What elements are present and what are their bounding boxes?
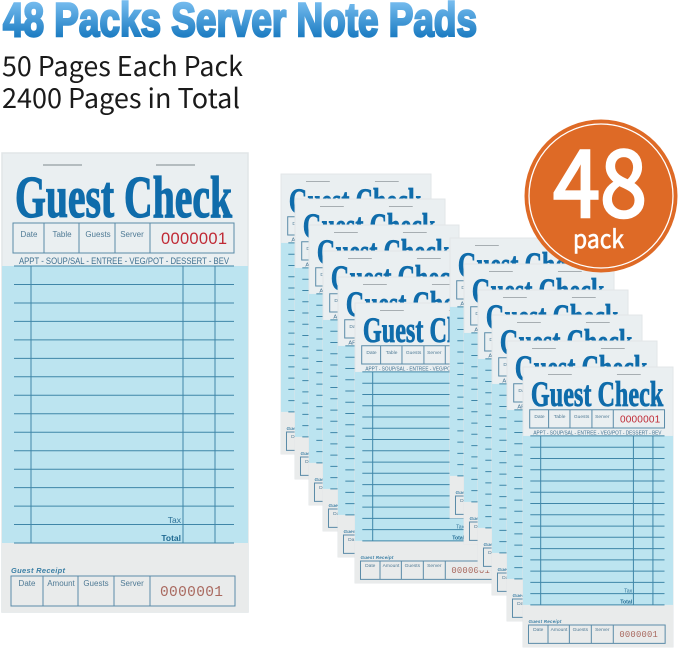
right stack pad 1: Date xyxy=(461,285,472,291)
right stack front pad: Guests xyxy=(574,414,590,420)
left stack pad 3 xyxy=(309,225,459,505)
check header labels: Table xyxy=(52,230,72,239)
left stack pad 4: Guest Check xyxy=(331,258,463,298)
left stack front pad: Server xyxy=(427,563,442,569)
badge: 48 pack: pack xyxy=(573,220,624,256)
left stack front pad: Guest Receipt xyxy=(360,555,394,560)
tax label: Tax xyxy=(168,515,182,525)
left stack pad 1: APPT xyxy=(291,238,307,244)
left stack pad 5: Date xyxy=(348,537,359,543)
left stack pad 4: Date xyxy=(333,511,344,517)
right stack pad 2 xyxy=(464,264,614,544)
check header labels xyxy=(21,230,144,239)
right stack pad 2: Guest Check xyxy=(472,271,604,311)
left stack front pad: 0000001 xyxy=(451,566,490,576)
right stack front pad: Tax xyxy=(624,589,633,595)
right stack pad 4: APPT xyxy=(502,379,518,385)
right stack front pad: Date xyxy=(534,414,545,420)
left stack pad 3: Guest Check xyxy=(317,232,449,272)
left stack pad 2: Guest Check xyxy=(303,206,435,246)
receipt labels xyxy=(19,579,144,588)
left stack front pad: Guests xyxy=(406,350,422,356)
receipt labels: Date xyxy=(19,579,36,588)
left stack front pad: Tax xyxy=(456,525,465,531)
right stack pad 1: Date xyxy=(460,498,471,504)
left stack pad 4: Date xyxy=(334,298,345,304)
left stack pad 3: APPT xyxy=(319,289,335,295)
right stack pad 5 xyxy=(507,341,657,621)
left stack front pad: Amount xyxy=(383,563,400,569)
right stack pad 5: Date xyxy=(518,388,529,394)
right stack front pad: Guest Receipt xyxy=(528,619,562,624)
right stack pad 2: Guest Receipt xyxy=(469,516,503,521)
left stack pad 4: Guest Receipt xyxy=(328,503,362,508)
right stack pad 1: APPT xyxy=(460,302,476,308)
right stack pad 4: Date xyxy=(503,362,514,368)
left stack front pad: APPT - SOUP/SAL - ENTREE - VEG/POT - DESSERT - BEV xyxy=(365,367,494,373)
right stack pad 1: Guest Receipt xyxy=(455,490,489,495)
check header labels: Server xyxy=(120,230,144,239)
total label: Total xyxy=(161,533,181,543)
receipt labels: Server xyxy=(120,579,144,588)
left stack pad 2: Date xyxy=(306,246,317,252)
left stack pad 5: Guest Receipt xyxy=(343,529,377,534)
right stack pad 2: Date xyxy=(474,524,485,530)
right stack pad 3: Date xyxy=(488,550,499,556)
check header labels: Date xyxy=(21,230,38,239)
pad heading: Guest Check xyxy=(15,164,232,230)
left stack front pad: 0000001 xyxy=(452,351,493,362)
right stack front pad xyxy=(523,367,673,647)
course line: APPT - SOUP/SAL - ENTREE - VEG/POT - DESSERT - BEV xyxy=(19,255,230,266)
left stack pad 3: Date xyxy=(319,485,330,491)
right stack front pad: Date xyxy=(533,627,544,633)
right stack pad 3: Date xyxy=(489,337,500,343)
right stack pad 1: Guest Check xyxy=(458,245,590,285)
right stack pad 2: APPT xyxy=(474,328,490,334)
left stack front pad: Date xyxy=(366,350,377,356)
right stack front pad: Server xyxy=(595,414,610,420)
right stack pad 5: Guest Receipt xyxy=(512,593,546,598)
left stack pad 1: Guest Check xyxy=(289,181,421,221)
left stack front pad: Guests xyxy=(405,563,421,569)
left stack front pad: Total xyxy=(452,536,465,542)
receipt number: 0000001 xyxy=(160,585,223,601)
right stack pad 3: Guest Receipt xyxy=(483,542,517,547)
subtitle: pages in total: 2400 Pages in Total xyxy=(2,77,240,116)
left stack pad 2: Date xyxy=(305,459,316,465)
left stack pad 5: APPT xyxy=(348,341,364,347)
right stack pad 1 xyxy=(450,238,600,518)
left stack pad 1: Date xyxy=(291,434,302,440)
right stack pad 4: Date xyxy=(502,575,513,581)
receipt labels: Amount xyxy=(47,579,76,588)
right stack pad 5: APPT xyxy=(517,405,533,411)
badge: 48 pack: 48 xyxy=(553,109,647,244)
left stack front pad: Guest Check xyxy=(363,310,495,350)
right stack front pad: 0000001 xyxy=(619,630,658,640)
left stack pad 3: Date xyxy=(320,272,331,278)
right stack front pad: Total xyxy=(620,600,633,606)
left stack front pad xyxy=(355,303,505,583)
right stack pad 3 xyxy=(478,290,628,570)
large guest check pad xyxy=(2,153,248,612)
right stack front pad: Server xyxy=(595,627,610,633)
left stack pad 2: APPT xyxy=(305,263,321,269)
left stack pad 5 xyxy=(338,277,488,557)
left stack pad 3: Guest Receipt xyxy=(314,477,348,482)
right stack front pad: Table xyxy=(554,414,566,420)
left stack pad 4: APPT xyxy=(333,315,349,321)
left stack front pad: Date xyxy=(365,563,376,569)
left stack pad 2 xyxy=(295,199,445,479)
left stack pad 4 xyxy=(323,251,473,531)
right stack pad 2: Date xyxy=(475,311,486,317)
left stack front pad: Server xyxy=(427,350,442,356)
serial number: 0000001 xyxy=(161,230,227,248)
badge: 48 pack xyxy=(524,109,678,272)
guest receipt label: Guest Receipt xyxy=(11,566,66,575)
left stack pad 1 xyxy=(281,174,431,454)
left stack pad 5: Guest Check xyxy=(346,284,478,324)
right stack front pad: Amount xyxy=(551,627,568,633)
receipt labels: Guests xyxy=(83,579,109,588)
right stack pad 5: Date xyxy=(517,601,528,607)
right stack front pad: Guests xyxy=(573,627,589,633)
right stack pad 3: APPT xyxy=(488,354,504,360)
left stack pad 5: Date xyxy=(349,324,360,330)
left stack front pad: Table xyxy=(386,350,398,356)
right stack pad 4: Guest Receipt xyxy=(497,567,531,572)
subtitle: pages each pack: 50 Pages Each Pack xyxy=(2,45,243,84)
left stack pad 1: Guest Receipt xyxy=(286,426,320,431)
left stack pad 1: Date xyxy=(292,221,303,227)
right stack pad 3: Guest Check xyxy=(486,297,618,337)
right stack pad 4 xyxy=(492,315,642,595)
check header labels: Guests xyxy=(85,230,111,239)
right stack front pad: 0000001 xyxy=(620,415,661,426)
left stack pad 2: Guest Receipt xyxy=(300,451,334,456)
